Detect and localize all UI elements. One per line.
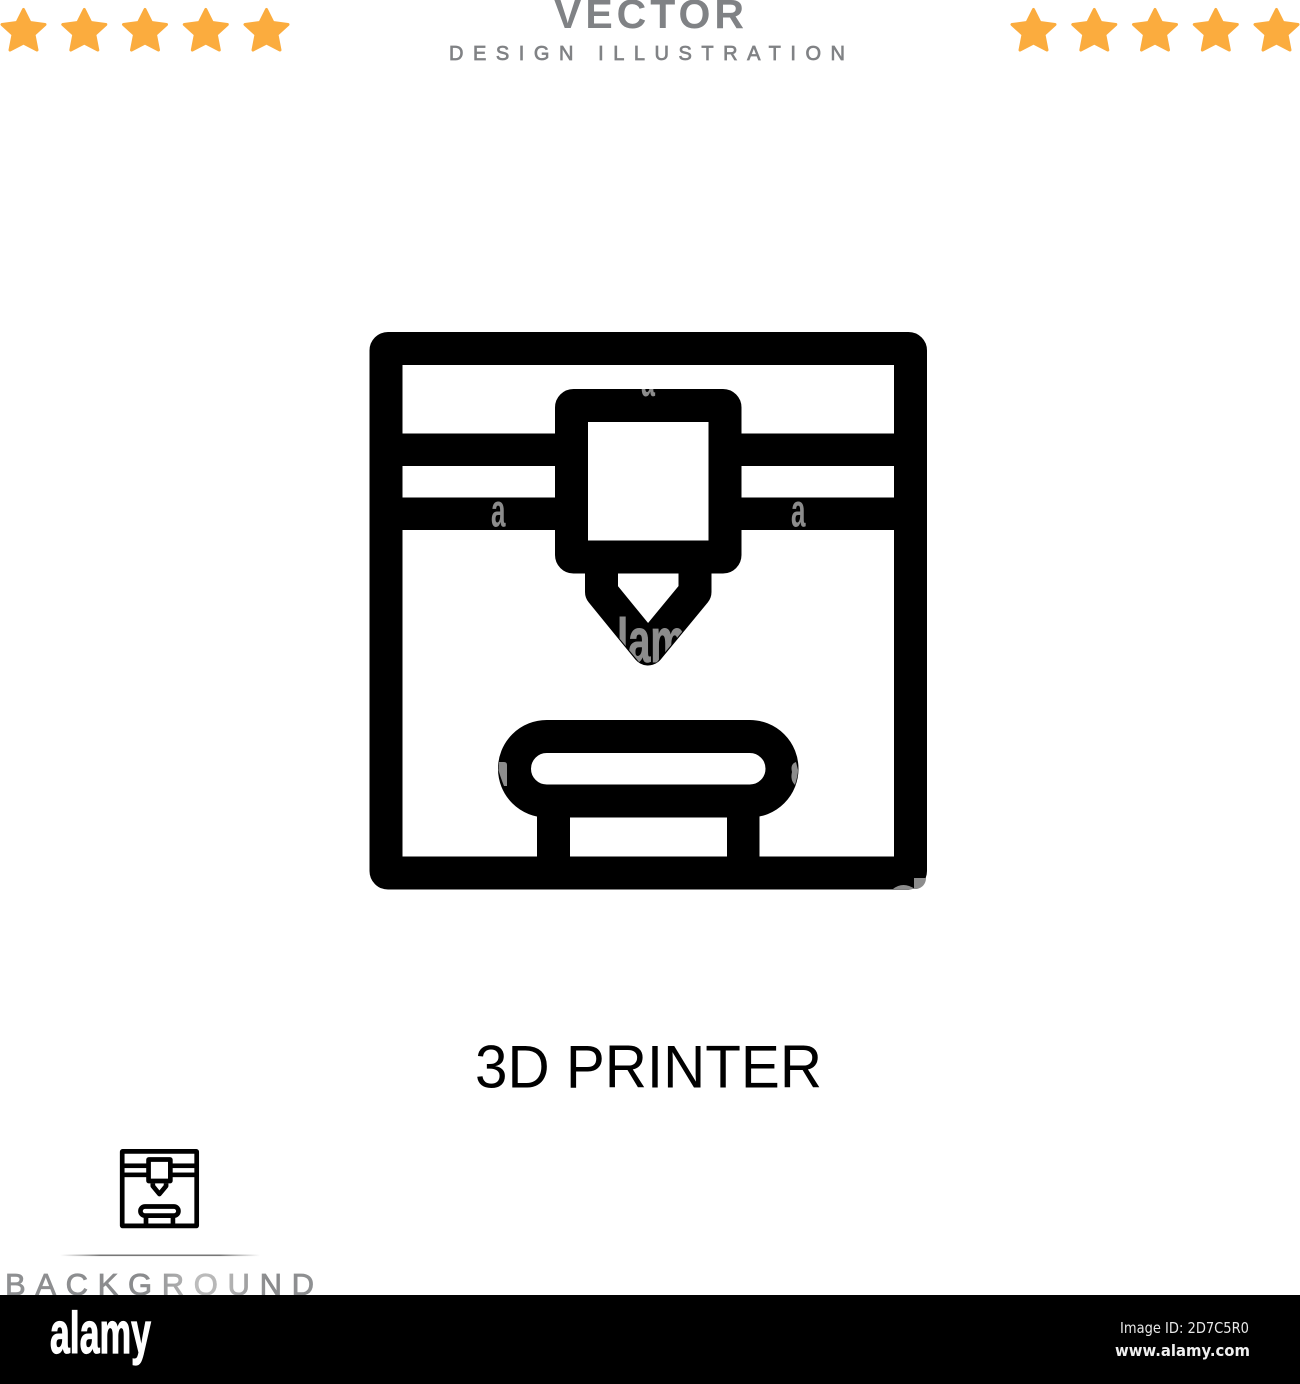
watermark fragments: a [491, 484, 506, 536]
footer url: www.alamy.com [1115, 1341, 1250, 1360]
icon: 3D printer small [122, 1151, 197, 1226]
icon label: 3D printer: 3D PRINTER [475, 1034, 822, 1100]
left star rating [2, 10, 288, 50]
watermark fragments: a [641, 354, 655, 406]
divider line [60, 1254, 260, 1256]
watermark fragments: alamy [595, 607, 708, 676]
watermark fragments [491, 354, 926, 889]
watermark fragments: a [791, 484, 806, 536]
footer image id: Image ID: 2D7C5R0 [1120, 1319, 1249, 1337]
icon: 3D printer large [386, 348, 926, 889]
subheading: design illustration: DESIGN ILLUSTRATION [449, 43, 845, 65]
right star rating [1012, 10, 1298, 50]
footer logo: alamy: alamy [50, 1301, 151, 1366]
background label: BACKGROUND [5, 1267, 314, 1302]
footer bar [0, 1295, 1300, 1384]
